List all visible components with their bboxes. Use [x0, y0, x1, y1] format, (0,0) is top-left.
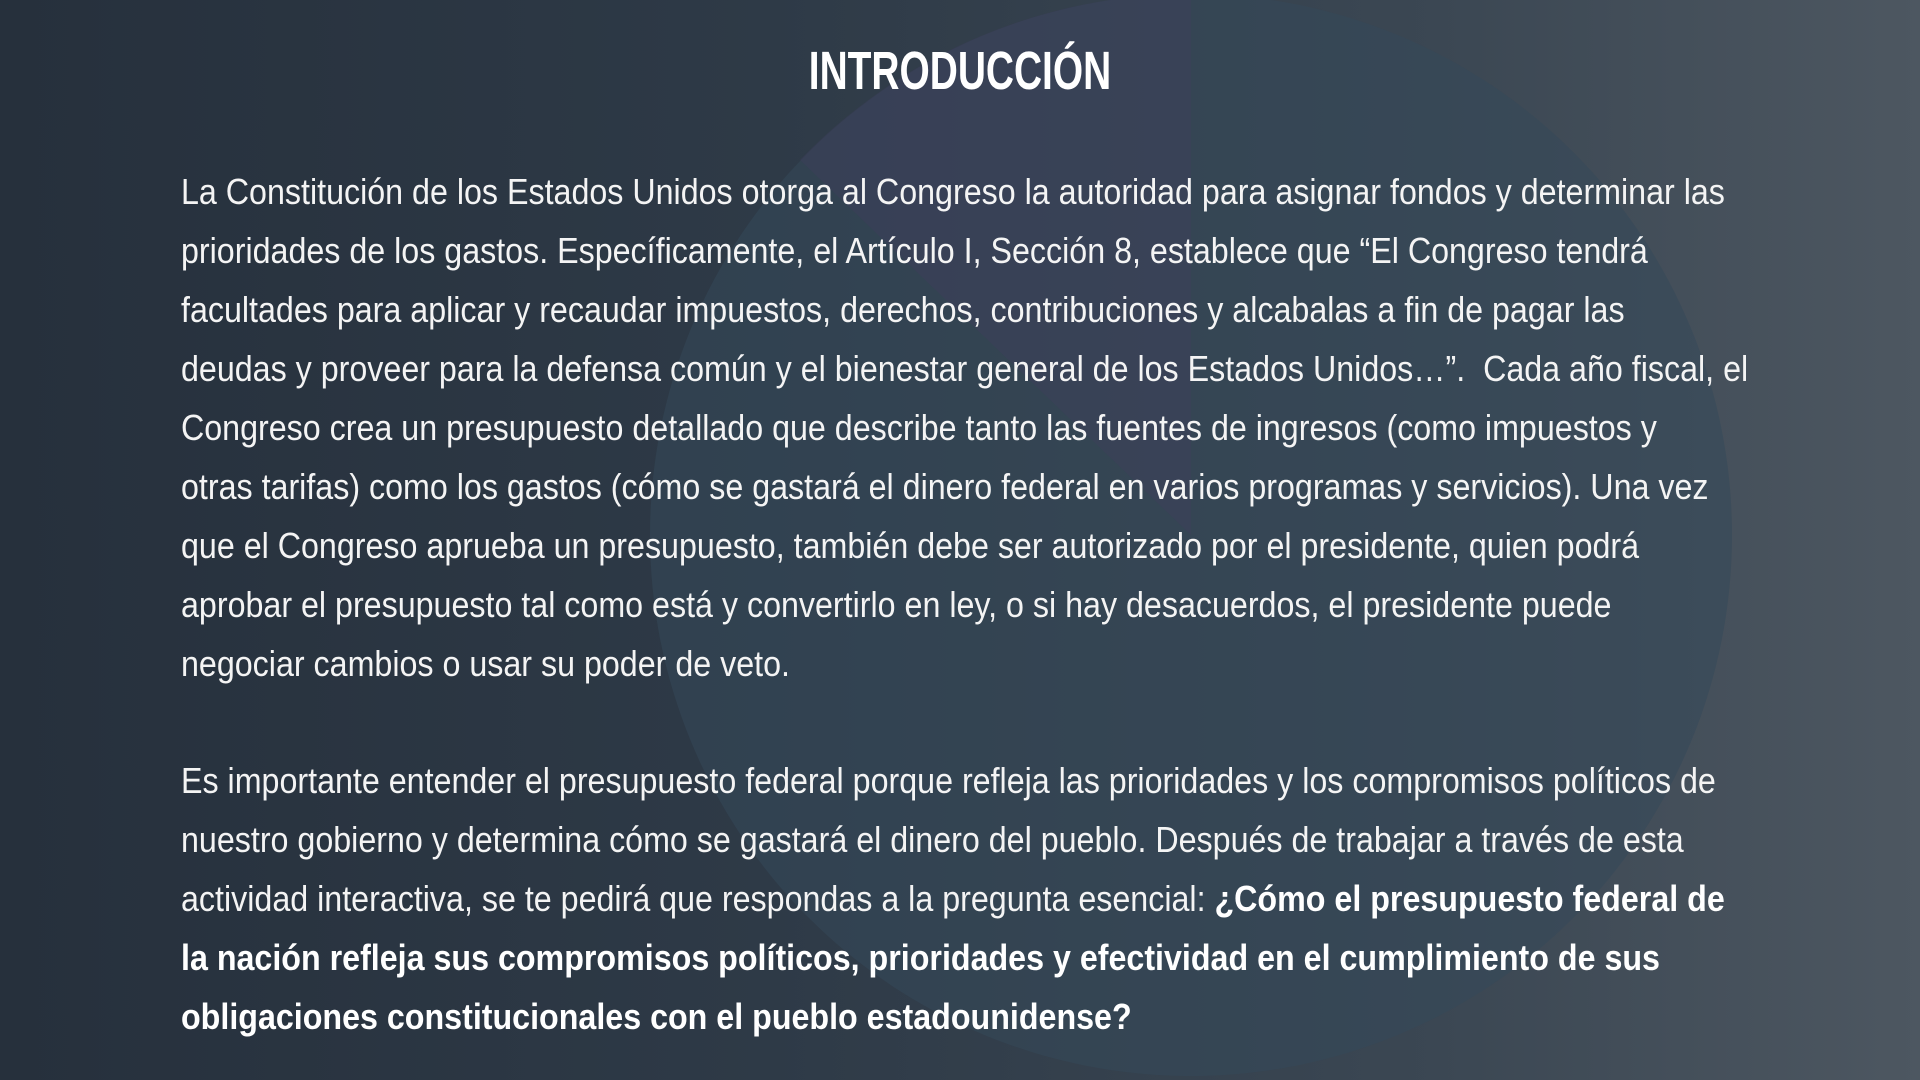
text block: paragraph 1: otras tarifas) como los gastos (cómo se gastará el dinero federal en varios programas y servicios). Una vez	[181, 466, 1709, 507]
text block: paragraph 1: La Constitución de los Estados Unidos otorga al Congreso la autoridad para asignar fondos y determinar las	[181, 171, 1725, 212]
text block: paragraph 1	[181, 171, 1748, 684]
text block: paragraph 1: que el Congreso aprueba un presupuesto, también debe ser autorizado por el presidente, quien podrá	[181, 525, 1639, 566]
text block: paragraph 1: aprobar el presupuesto tal como está y convertirlo en ley, o si hay desacuerdos, el presidente puede	[181, 584, 1611, 625]
text block: paragraph 2 with essential question: obligaciones constitucionales con el pueblo estadounidense?	[181, 996, 1132, 1037]
text block: paragraph 1: Congreso crea un presupuesto detallado que describe tanto las fuentes de ingresos (como impuestos y	[181, 407, 1657, 448]
text block: paragraph 2 with essential question: la nación refleja sus compromisos políticos, prioridades y efectividad en el cumplimiento de sus	[181, 937, 1660, 978]
text block: paragraph 2 with essential question: actividad interactiva, se te pedirá que respondas a la pregunta esencial: ¿Cómo el presupuesto federal de	[181, 878, 1725, 919]
text block: paragraph 2 with essential question	[181, 760, 1725, 1037]
text block: paragraph 1: facultades para aplicar y recaudar impuestos, derechos, contribuciones y alcabalas a fin de pagar las	[181, 289, 1625, 330]
text block: paragraph 2 with essential question: Es importante entender el presupuesto federal porque refleja las prioridades y los compromisos políticos de	[181, 760, 1716, 801]
text block: paragraph 1: negociar cambios o usar su poder de veto.	[181, 643, 790, 684]
text block: paragraph 2 with essential question: nuestro gobierno y determina cómo se gastará el dinero del pueblo. Después de trabajar a través de esta	[181, 819, 1684, 860]
text block: paragraph 1: deudas y proveer para la defensa común y el bienestar general de los Estados Unidos…”. Cada año fiscal, el	[181, 348, 1748, 389]
title: INTRODUCCIÓN	[809, 41, 1111, 101]
text block: paragraph 1: prioridades de los gastos. Específicamente, el Artículo I, Sección 8, establece que “El Congreso tendrá	[181, 230, 1648, 271]
